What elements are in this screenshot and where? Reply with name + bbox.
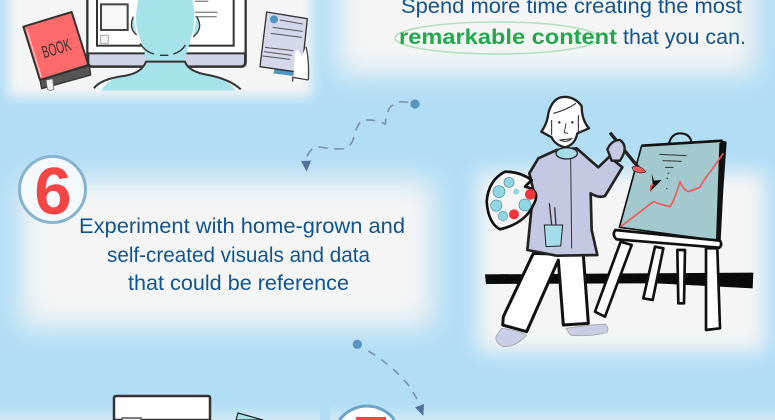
heading: spend more time text bbox=[395, 0, 746, 54]
badge: number 7 bbox=[340, 406, 394, 420]
panel: top left background bbox=[8, 0, 312, 97]
panel: artist background bbox=[478, 172, 765, 352]
trousers bbox=[503, 253, 588, 332]
illustration: bottom monitor and envelope bbox=[114, 396, 263, 420]
icon: red book: BOOK bbox=[39, 34, 73, 62]
icon: red book bbox=[23, 12, 91, 91]
callout: remarkable content highlight bbox=[395, 22, 617, 54]
arrow: dashed curve to step 7 bbox=[353, 340, 424, 416]
arrow: wavy dashed to step 6 bbox=[301, 99, 420, 172]
shoes bbox=[496, 324, 608, 347]
badge: number 6: 6 bbox=[34, 154, 72, 229]
person seen from behind bbox=[94, 0, 241, 91]
panel: bottom left background bbox=[0, 403, 320, 420]
heading: spend more time text: that you can. bbox=[623, 26, 746, 49]
coat bbox=[527, 148, 622, 256]
text: step 6 description: Experiment with home-grown and bbox=[79, 215, 405, 238]
callout: remarkable content highlight: remarkable content bbox=[399, 26, 617, 49]
head with hair bbox=[541, 97, 589, 147]
illustration: artist painting a chart on an easel bbox=[485, 97, 753, 347]
text: step 6 description bbox=[79, 215, 405, 295]
palette bbox=[487, 172, 536, 229]
text: step 6 description: self-created visuals and data bbox=[107, 244, 370, 267]
easel legs bbox=[595, 242, 720, 330]
easel shelf bbox=[614, 230, 721, 248]
panel: bottom right background bbox=[330, 403, 775, 420]
envelope bbox=[236, 413, 263, 420]
icon: document in hand bbox=[260, 12, 309, 82]
monitor bbox=[87, 0, 246, 67]
floor stroke bbox=[485, 273, 753, 288]
panel: step 6 text background bbox=[20, 180, 433, 327]
text: step 6 description: that could be reference bbox=[128, 272, 349, 295]
badge: number 6 bbox=[20, 154, 86, 229]
canvas with line chart bbox=[619, 133, 727, 241]
monitor top bbox=[114, 396, 210, 420]
monitor small box bbox=[122, 418, 141, 420]
illustration: person at computer with book and document bbox=[23, 0, 309, 91]
panel: top right background bbox=[338, 0, 755, 75]
hand with paintbrush bbox=[607, 133, 646, 173]
